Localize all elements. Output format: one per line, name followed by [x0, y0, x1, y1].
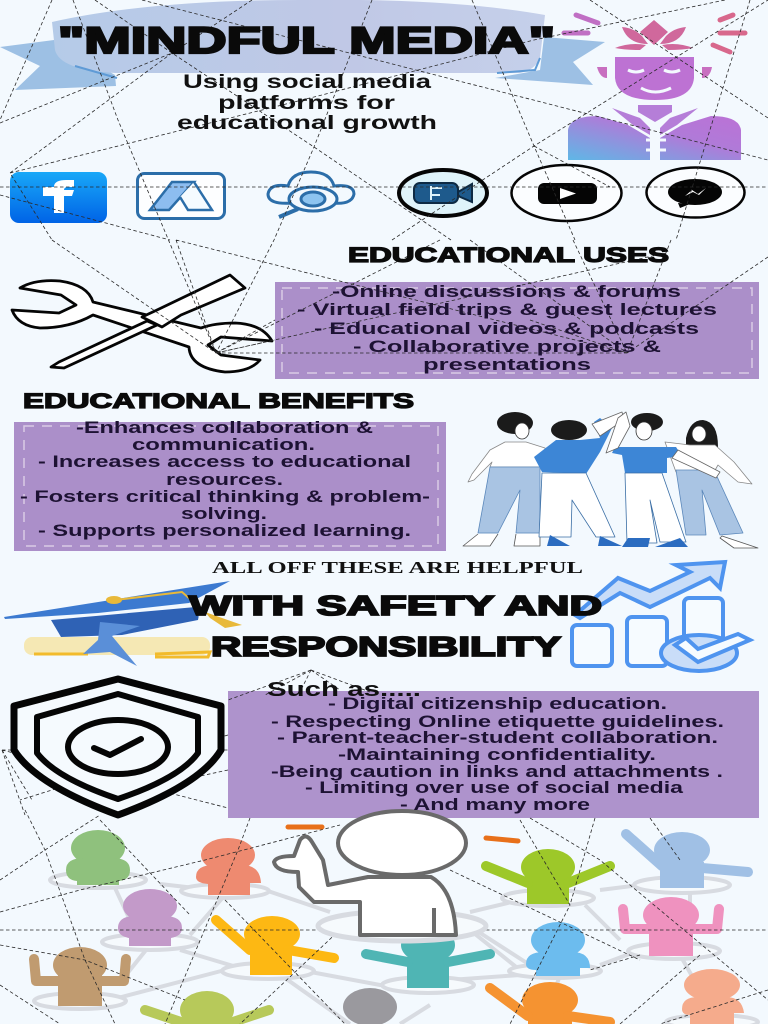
text: educational benefits list [20, 418, 430, 540]
text: educational benefits list: - Supports personalized learning. [38, 521, 411, 540]
text: safety list: - Digital citizenship education. [328, 694, 667, 713]
person 4 [665, 420, 758, 548]
icon: shield with check [14, 679, 221, 815]
text: educational benefits list: resources. [166, 470, 283, 489]
subtitle: Using social media [183, 72, 432, 93]
panel: educational benefits box [14, 422, 446, 551]
icon: cloud search [268, 172, 354, 217]
person: purple [102, 889, 198, 950]
text: educational uses list [297, 282, 717, 374]
subtitle: educational growth [177, 113, 437, 134]
person 2 [534, 412, 624, 546]
person: orange [490, 982, 610, 1024]
text: safety list: - Respecting Online etiquette guidelines. [271, 712, 724, 731]
social icons row [10, 165, 744, 223]
text: educational uses list: -Online discussions & forums [332, 282, 681, 301]
icon: growth chart with check [572, 562, 750, 671]
text: safety list: -Maintaining confidentiality. [338, 745, 656, 764]
text: safety list: -Being caution in links and attachments . [271, 762, 723, 781]
title banner ribbon [0, 0, 605, 90]
illustration: team high five [463, 412, 758, 548]
person 1 [463, 412, 545, 546]
heading: with safety and responsibility [189, 590, 602, 662]
text: safety list: - Parent-teacher-student collaboration. [277, 728, 718, 747]
tools icon: wrench and screwdriver [12, 275, 272, 372]
heading: educational uses: EDUCATIONAL USES [348, 244, 669, 267]
meditating figure icon [564, 15, 745, 160]
person: brown [34, 947, 126, 1009]
text: educational benefits list: communication. [132, 435, 315, 454]
heading: educational benefits: EDUCATIONAL BENEFITS [23, 390, 414, 413]
icon: video camera [399, 170, 487, 216]
person: yellow [216, 916, 334, 979]
text: educational benefits list: solving. [181, 504, 267, 523]
text: educational benefits list: - Increases access to educational [38, 452, 411, 471]
text: educational benefits list: -Enhances collaboration & [76, 418, 373, 437]
text: educational uses list: - Educational videos & podcasts [314, 319, 699, 338]
big white pointing figure [274, 811, 486, 941]
person: green [50, 830, 146, 888]
person: pink [623, 897, 720, 959]
panel: educational uses box [275, 282, 759, 379]
person: yellow green [145, 991, 269, 1024]
person: teal [366, 927, 490, 993]
text: safety list: - And many more [400, 795, 590, 814]
person: periwinkle [626, 832, 748, 893]
heading: with safety and responsibility: RESPONSIBILITY [211, 631, 561, 662]
text: all off these are helpful: ALL OFF THESE ARE HELPFUL [212, 558, 583, 577]
text: educational uses list: - Virtual field trips & guest lectures [297, 300, 717, 319]
icon: triangle app [138, 174, 224, 218]
heading: with safety and responsibility: WITH SAFETY AND [189, 590, 602, 621]
person: lime [486, 849, 610, 906]
text: safety list [271, 694, 724, 814]
title: "MINDFUL MEDIA" [58, 20, 555, 61]
person: sky blue [509, 922, 601, 978]
text: safety list: - Limiting over use of social media [305, 778, 684, 797]
person: peach [666, 969, 758, 1024]
person: salmon [181, 838, 269, 898]
icon: graduation cap and diploma [4, 581, 242, 666]
text: educational benefits list: - Fosters critical thinking & problem- [20, 487, 430, 506]
text: educational uses list: - Collaborative projects & [353, 337, 661, 356]
subtitle: platforms for [218, 93, 396, 114]
icon: facebook [10, 172, 107, 223]
network: bottom people [34, 830, 758, 1024]
orange accent dashes [288, 827, 518, 841]
network: bottom connections [110, 884, 700, 1024]
panel: safety list box [228, 691, 759, 818]
icon: messenger [646, 168, 744, 218]
subtitle [177, 72, 437, 134]
text: educational uses list: presentations [423, 355, 591, 374]
person: grey [342, 988, 398, 1024]
person 3 [606, 412, 720, 547]
text: such as: Such as..... [267, 679, 421, 701]
icon: youtube [512, 165, 622, 221]
